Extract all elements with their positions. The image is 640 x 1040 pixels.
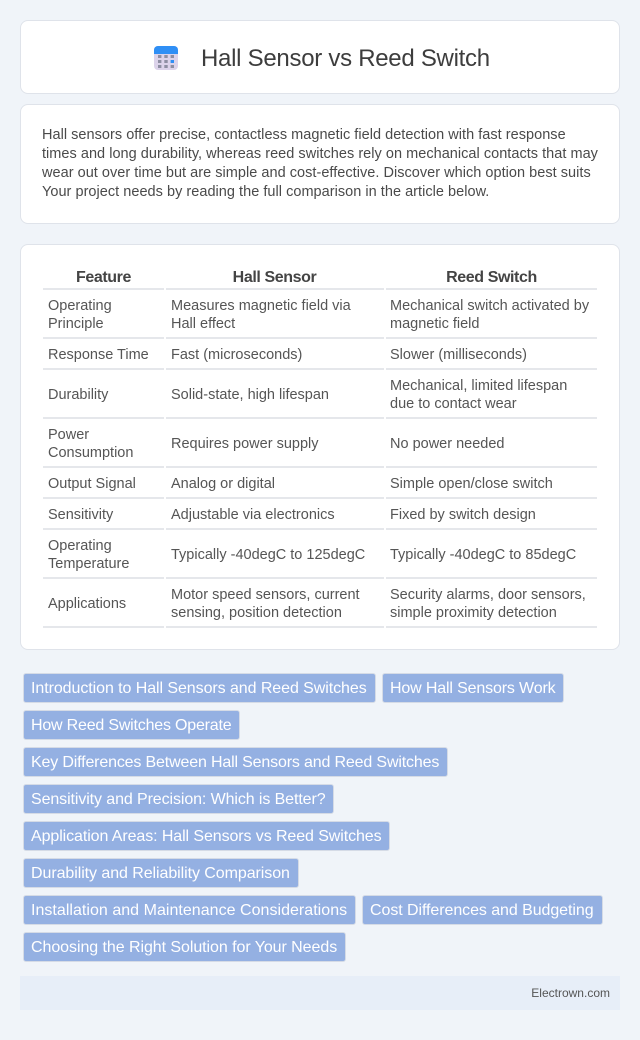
row: response time: Response Time: [48, 347, 149, 363]
tag: How Hall Sensors Work: [390, 680, 556, 697]
row: applications: Applications: [48, 596, 126, 612]
tag: [23, 858, 299, 888]
title: Hall Sensor vs Reed Switch: [201, 45, 490, 72]
tag: [382, 673, 564, 703]
comparison table: Simple open/close switch: [390, 476, 553, 492]
comparison table: [43, 269, 597, 628]
row: durability: Durability: [48, 387, 108, 403]
row: sensitivity: Sensitivity: [48, 507, 113, 523]
comparison table: Motor speed sensors, current: [171, 587, 360, 603]
tag: [23, 784, 334, 814]
icon: calendar grid: [154, 46, 178, 70]
tag: [23, 747, 448, 777]
footer bar: [20, 976, 620, 1010]
header: reed switch: Reed Switch: [446, 269, 537, 286]
comparison table: Measures magnetic field via: [171, 298, 351, 314]
row: power consumption: Power: [48, 427, 89, 443]
comparison table: magnetic field: [390, 316, 479, 332]
comparison table: Typically -40degC to 125degC: [171, 547, 365, 563]
comparison table: Requires power supply: [171, 436, 318, 452]
intro text: times and long durability, whereas reed switches rely on mechanical contacts that may: [42, 146, 598, 162]
tag: [23, 895, 356, 925]
intro panel: [20, 104, 620, 224]
title panel: [20, 20, 620, 94]
comparison table: Hall effect: [171, 316, 235, 332]
comparison table: Solid-state, high lifespan: [171, 387, 329, 403]
intro text: Hall sensors offer precise, contactless magnetic field detection with fast response: [42, 127, 566, 143]
comparison table: Fast (microseconds): [171, 347, 302, 363]
intro text: wear out over time but are simple and cost-effective. Discover which option best suits: [42, 165, 591, 181]
tag: [23, 673, 376, 703]
row: power consumption: [48, 427, 133, 461]
comparison table: Mechanical, limited lifespan: [390, 378, 567, 394]
tag: [23, 932, 346, 962]
tag: How Reed Switches Operate: [31, 717, 231, 734]
row: power consumption: Consumption: [48, 445, 133, 461]
comparison table: Fixed by switch design: [390, 507, 536, 523]
comparison table: Typically -40degC to 85degC: [390, 547, 576, 563]
tag: [23, 821, 390, 851]
row: output signal: Output Signal: [48, 476, 136, 492]
comparison table: Slower (milliseconds): [390, 347, 527, 363]
tag: Key Differences Between Hall Sensors and Reed Switches: [31, 754, 439, 771]
tag: Application Areas: Hall Sensors vs Reed Switches: [31, 828, 382, 845]
row: operating temperature: Temperature: [48, 556, 129, 572]
intro text: Your project needs by reading the full comparison in the article below.: [42, 184, 489, 200]
tag: Choosing the Right Solution for Your Needs: [31, 939, 337, 956]
tag: Sensitivity and Precision: Which is Better?: [31, 791, 326, 808]
row: operating principle: Operating: [48, 298, 112, 314]
row: operating principle: [48, 298, 112, 332]
row: operating principle: Principle: [48, 316, 104, 332]
comparison table: Analog or digital: [171, 476, 275, 492]
comparison table panel: [20, 244, 620, 650]
comparison table: Security alarms, door sensors,: [390, 587, 586, 603]
header: hall sensor: Hall Sensor: [233, 269, 316, 286]
comparison table: simple proximity detection: [390, 605, 557, 621]
comparison table: sensing, position detection: [171, 605, 342, 621]
tag: [362, 895, 603, 925]
tag: Installation and Maintenance Considerations: [31, 902, 347, 919]
comparison table: No power needed: [390, 436, 504, 452]
topic tags: [23, 673, 603, 962]
comparison table: Adjustable via electronics: [171, 507, 335, 523]
comparison table: due to contact wear: [390, 396, 517, 412]
intro text: [42, 127, 598, 200]
header: feature: Feature: [76, 269, 131, 286]
tag: Introduction to Hall Sensors and Reed Switches: [31, 680, 367, 697]
row: operating temperature: Operating: [48, 538, 112, 554]
row: operating temperature: [48, 538, 129, 572]
tag: Cost Differences and Budgeting: [370, 902, 594, 919]
tag: [23, 710, 240, 740]
footer credit: Electrown.com: [531, 986, 610, 1000]
comparison table: Mechanical switch activated by: [390, 298, 589, 314]
tag: Durability and Reliability Comparison: [31, 865, 290, 882]
